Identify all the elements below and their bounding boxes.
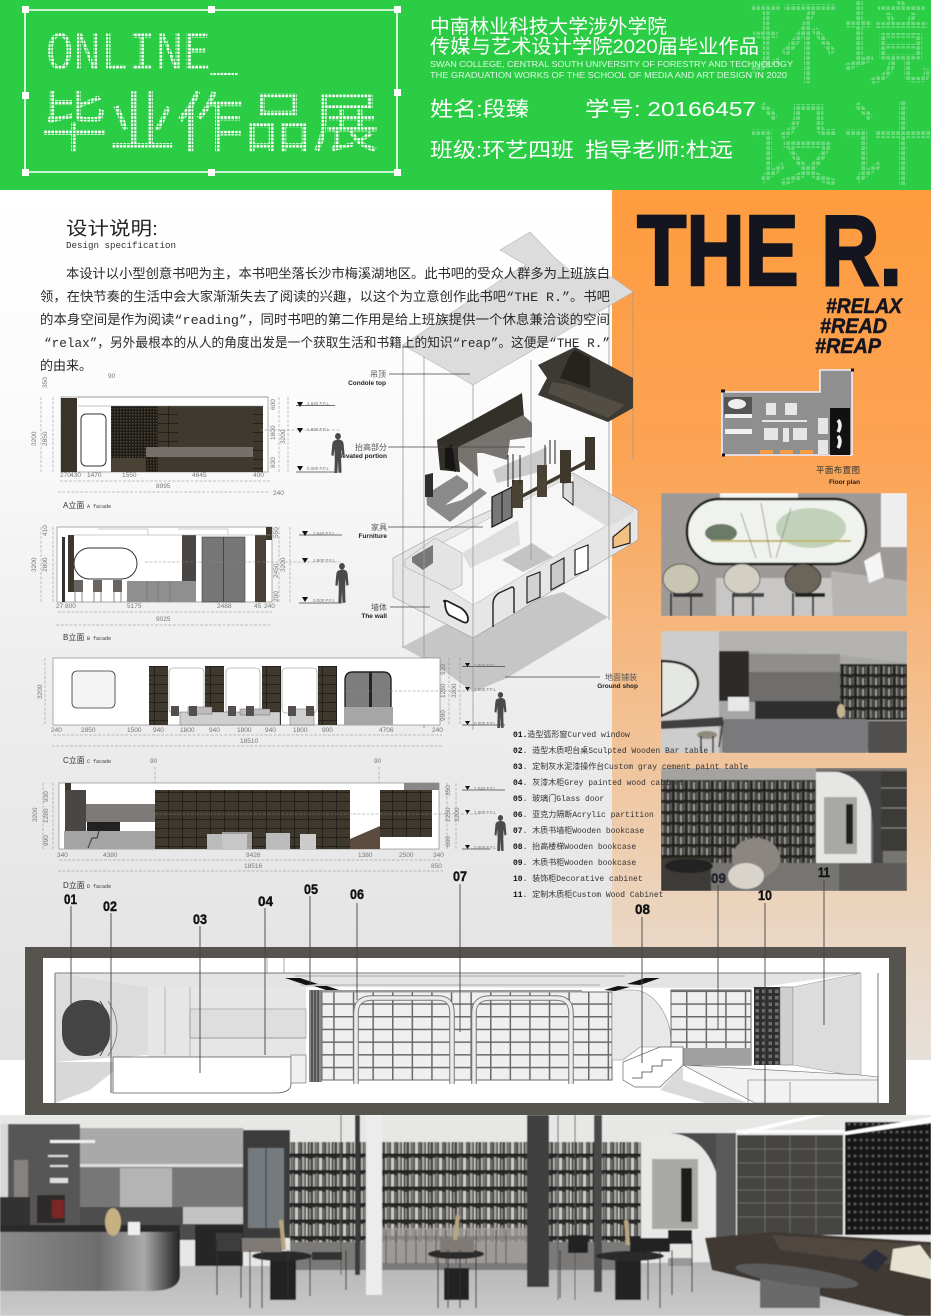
elevation B dimensions [41, 527, 340, 625]
legend list: 02. 造型木质吧台桌Sculpted Wooden Bar table [513, 745, 708, 756]
elevation D [32, 758, 506, 890]
right shelves [737, 1122, 931, 1235]
elevation A: 8995 [156, 483, 171, 490]
legend list: 03. 定制灰水泥漆操作台Custom gray cement paint table [513, 761, 748, 772]
school names: 传媒与艺术设计学院2020届毕业作品 [430, 36, 759, 58]
photo: oval window [661, 493, 907, 616]
legend list: 06. 亚克力隔断Acrylic partition [513, 809, 654, 820]
elevation B levels [299, 531, 349, 603]
school names: THE GRADUATION WORKS OF THE SCHOOL OF MEDIA AND ART DESIGN IN 2020 [430, 71, 787, 80]
elevation A dimensions [41, 397, 340, 492]
elevation C: 240 [51, 727, 62, 734]
elevation D: 90 [150, 758, 158, 765]
label: 抬高部分: 抬高部分 [355, 442, 387, 452]
floor plan caption [816, 465, 860, 486]
section: glass block partition [754, 987, 780, 1065]
elevation C caption: C facade [87, 759, 111, 765]
elevation C: 900 [322, 727, 333, 734]
elevation C: 3200 [451, 683, 458, 698]
elevation D caption [63, 880, 111, 890]
elevation B: 410 [42, 525, 49, 536]
elevation D: 3200 [454, 807, 461, 822]
elevation C dimensions [45, 658, 470, 746]
elevation C: 940 [153, 727, 164, 734]
elevation A: 1470 [87, 472, 102, 479]
elevation C: 990 [440, 710, 447, 721]
text block: design description [40, 266, 610, 374]
label: 吊顶: Condole top [348, 380, 386, 387]
section: black ceiling lights [285, 978, 660, 991]
elevation D: 1380 [358, 852, 373, 859]
student info: 姓名:段臻 [430, 98, 529, 121]
axonometric: projection lines [403, 292, 633, 730]
section: curved window [62, 1000, 117, 1056]
elevation C [37, 658, 506, 765]
legend list: 04. 灰漆木柜Grey painted wood cabinet [513, 777, 684, 788]
section frame [25, 947, 906, 1115]
tags: relax read reap: #READ [820, 315, 887, 338]
student info: 指导老师:杜远 [585, 139, 733, 162]
elevation D: 990 [43, 835, 50, 846]
elevation D: 1280 [43, 808, 50, 823]
floor plan caption: 平面布置图 [816, 465, 860, 475]
elevation C: 18510 [240, 738, 258, 745]
axonometric labels [388, 374, 600, 677]
elevation A levels [296, 401, 345, 473]
elevation A levels: 0.000 F.F.L [307, 466, 330, 471]
axonometric: elevated portion [437, 393, 532, 477]
school names [430, 16, 794, 80]
section: back wall left [148, 987, 306, 1057]
elevation A: 270 [60, 472, 71, 479]
label: 家具: Furniture [358, 533, 387, 540]
elevation C: 1500 [127, 727, 142, 734]
title frame [22, 6, 401, 176]
section: arches [356, 998, 571, 1084]
ceiling lights [736, 1115, 931, 1135]
callout numbers: 04 [258, 893, 273, 909]
label: 地面铺装 [597, 672, 638, 690]
elevation B: 550 [273, 527, 280, 538]
elevation D levels: 1.800 F.F.L [474, 810, 497, 815]
elevation A: 3200 [31, 431, 38, 446]
section: right arched wall [612, 990, 671, 1060]
elevation D: 18516 [244, 863, 262, 870]
tags: relax read reap [815, 295, 904, 358]
elevation C: 1800 [293, 727, 308, 734]
elevation B: 200 [273, 591, 280, 602]
elevation D: 930 [43, 791, 50, 802]
elevation D dimensions [43, 767, 480, 871]
elevation C: 3200 [37, 684, 44, 699]
legend list: 07. 木质书墙柜Wooden bookcase [513, 825, 644, 836]
book wall [290, 1142, 641, 1242]
elevation C: 940 [209, 727, 220, 734]
elevation A: 2850 [42, 431, 49, 446]
elevation D caption: D立面 [63, 880, 85, 890]
elevation C levels: 2.840 F.F.L [474, 663, 497, 668]
axonometric: ground slab [402, 592, 608, 692]
callout numbers: 06 [350, 886, 364, 902]
heading: design specification: Design specification [66, 240, 176, 251]
tags: relax read reap: #REAP [815, 335, 882, 358]
callout numbers [64, 864, 830, 927]
elevation D: 4380 [103, 852, 118, 859]
elevation B caption: B立面 [63, 632, 84, 642]
bar counter [0, 1208, 180, 1291]
watermark: 环境设计 [745, 0, 931, 198]
elevation D: 2500 [399, 852, 414, 859]
legend list: 10. 装饰柜Decorative cabinet [513, 873, 643, 884]
section: bookcase wall [322, 992, 612, 1080]
elevation D: 2250 [445, 807, 452, 822]
photo: main interior panorama [0, 1115, 931, 1316]
elevation A: 1550 [122, 472, 137, 479]
elevation C: 940 [265, 727, 276, 734]
elevation A levels: 2.840 F.F.L [307, 401, 330, 406]
left wall [0, 1124, 290, 1266]
label: 吊顶: 吊顶 [370, 370, 386, 379]
elevation B: 240 [264, 603, 275, 610]
elevation C: 2850 [81, 727, 96, 734]
section: right wall [793, 973, 861, 1077]
section: left wall [55, 973, 148, 1062]
elevation B: 3200 [31, 557, 38, 572]
label: 地面铺装: 地面铺装 [605, 672, 637, 682]
elevation A caption: A facade [87, 504, 111, 510]
elevation D levels: 2.840 F.F.L [474, 786, 497, 791]
label: 家具: 家具 [371, 522, 387, 532]
elevation A caption: A立面 [63, 500, 84, 510]
text block: design description: 本设计以小型创意书吧为主，本书吧坐落长沙市梅溪湖地区。此书吧的受众人群多为上班族白 [66, 266, 610, 282]
title: 毕业作品展: 毕业作品展 [40, 86, 380, 160]
text block: design description: 的本身空间是作为阅读“reading”，同时书吧的第二作用是给上班族提供一个休息兼洽谈的空间 [40, 312, 610, 328]
axonometric: wall shell [393, 473, 638, 638]
elevation C: 1280 [440, 683, 447, 698]
elevation D: 340 [57, 852, 68, 859]
floor [0, 1262, 931, 1316]
elevation C caption: C立面 [63, 755, 85, 765]
axonometric: top dark volume [538, 347, 633, 422]
heading: design specification: 设计说明: [66, 218, 158, 239]
elevation A: 350 [42, 377, 49, 388]
elevation C: 1800 [180, 727, 195, 734]
coffee table [734, 1258, 860, 1308]
text block: design description: 领，在快节奏的生活中会大家渐渐失去了阅读的兴趣，以这个为立意创作此书吧“THE R.”。书吧 [40, 289, 610, 305]
text block: design description: “relax”，另外最根本的从人的角度出发是一个获取生活和书籍上的知识“reap”。这便是“THE R.” [44, 335, 610, 351]
elevation A: 600 [270, 399, 277, 410]
axonometric: ceiling plate [403, 232, 633, 385]
callout numbers: 08 [635, 901, 650, 917]
elevation C caption [63, 755, 111, 765]
elevation A: 4645 [192, 472, 207, 479]
legend list: 01.造型弧形窗Curved window [513, 729, 630, 740]
elevation D: 350 [445, 785, 452, 796]
coffee machines [0, 1195, 180, 1232]
elevation B: 800 [65, 603, 76, 610]
section: glass door [309, 990, 322, 1082]
elevation B: 27 [56, 603, 64, 610]
callout numbers: 05 [304, 881, 318, 897]
floor plan caption: Floor plan [829, 479, 860, 486]
watermark: 环境设计: 设计 [748, 96, 931, 198]
elevation B levels: 0.000 F.F.L [313, 598, 336, 603]
elevation D: 9426 [246, 852, 261, 859]
elevation B: 9025 [156, 616, 171, 623]
elevation B levels: 2.840 F.F.L [313, 531, 336, 536]
label: 地面铺装: Ground shop [597, 683, 638, 690]
page background [0, 190, 931, 1060]
columns [341, 1115, 602, 1300]
elevation B caption: B facade [87, 636, 111, 642]
elevation C: 930 [440, 664, 447, 675]
elevation C levels [462, 663, 506, 728]
elevation A: 1800 [270, 425, 277, 440]
legend list: 09. 木质书柜Wooden bookcase [513, 857, 636, 868]
heading: design specification [66, 218, 176, 251]
student info [430, 98, 756, 162]
section: upper bookcase [671, 990, 751, 1065]
axonometric: furniture and partitions [425, 437, 595, 527]
elevation D: 600 [445, 836, 452, 847]
photo: reception counter [661, 631, 907, 753]
legend list: 05. 玻璃门Glass door [513, 793, 604, 804]
elevation D levels [462, 786, 506, 851]
callout numbers: 11 [818, 864, 830, 880]
callout numbers: 09 [711, 870, 726, 886]
callout numbers: 07 [453, 868, 467, 884]
elevation D caption: D facade [87, 884, 111, 890]
label: 墙体 [361, 602, 387, 620]
section: ceiling [55, 973, 861, 988]
exploded axonometric drawing [336, 232, 638, 730]
label: 墙体: The wall [361, 613, 387, 620]
elevation A levels: 1.800 F.F.L [307, 427, 330, 432]
elevation B [31, 525, 349, 642]
label: 抬高部分: Elevated portion [336, 453, 387, 460]
section outline lines [55, 973, 878, 1103]
label: 墙体: 墙体 [371, 602, 387, 612]
tags: relax read reap: #RELAX [826, 295, 904, 318]
label: 抬高部分 [336, 442, 387, 460]
elevation B: 2450 [273, 563, 280, 578]
elevation C: 240 [432, 727, 443, 734]
sofa [705, 1232, 931, 1316]
elevation B: 3200 [280, 557, 287, 572]
student info: 学号: 20166457 [585, 98, 756, 121]
elevation C levels: 1.800 F.F.L [474, 687, 497, 692]
callout lines [71, 880, 824, 1103]
school names: SWAN COLLEGE, CENTRAL SOUTH UNIVERSITY OF FORESTRY AND TECHNOLOGY [430, 60, 794, 69]
elevation A: 430 [70, 472, 81, 479]
elevation B: 5175 [127, 603, 142, 610]
panel: green header [0, 0, 931, 198]
section: platform and stairs [623, 1047, 878, 1103]
label: 吊顶 [348, 370, 386, 387]
panel: orange column [612, 190, 931, 1060]
callout numbers: 02 [103, 898, 117, 914]
elevation A: 830 [270, 457, 277, 468]
elevation C: 1800 [237, 727, 252, 734]
elevation B: 45 [254, 603, 262, 610]
elevation A: 3200 [280, 429, 287, 444]
elevation D: 90 [374, 758, 382, 765]
elevation C: 4706 [379, 727, 394, 734]
arched white wall [641, 1133, 736, 1240]
elevation B: 2800 [42, 557, 49, 572]
elevation D levels: 0.000 F.F.L [474, 845, 497, 850]
floor plan [721, 370, 854, 464]
legend list: 11. 定制木质柜Custom Wood Cabinet [513, 889, 663, 900]
legend list: 08. 抬高楼梯Wooden bookcase [513, 841, 636, 852]
elevation A [31, 373, 345, 510]
elevation A caption [63, 500, 111, 510]
label: 家具 [358, 522, 387, 540]
elevation B levels: 1.800 F.F.L [313, 558, 336, 563]
text block: design description: 的由来。 [40, 358, 92, 374]
school names: 中南林业科技大学涉外学院 [430, 16, 667, 38]
callout numbers: 01 [64, 891, 77, 907]
elevation A: 400 [253, 472, 264, 479]
elevation A: 240 [273, 490, 284, 497]
student info: 班级:环艺四班 [430, 139, 574, 162]
glass partition [382, 1228, 528, 1264]
callout numbers: 03 [193, 911, 207, 927]
legend list [513, 729, 748, 900]
elevation C levels: 0.000 F.F.L [474, 721, 497, 726]
section: counter [113, 1057, 291, 1093]
elevation A: 90 [108, 373, 116, 380]
elevation B: 2488 [217, 603, 232, 610]
dining tables and chairs [216, 1215, 692, 1308]
title: ONLINE_: ONLINE_ [46, 25, 238, 86]
elevation D: 850 [431, 863, 442, 870]
photo: bookcase lounge [661, 768, 907, 891]
elevation D: 340 [433, 852, 444, 859]
elevation B caption [63, 632, 111, 642]
elevation D: 3200 [32, 807, 39, 822]
callout numbers: 10 [758, 887, 772, 903]
